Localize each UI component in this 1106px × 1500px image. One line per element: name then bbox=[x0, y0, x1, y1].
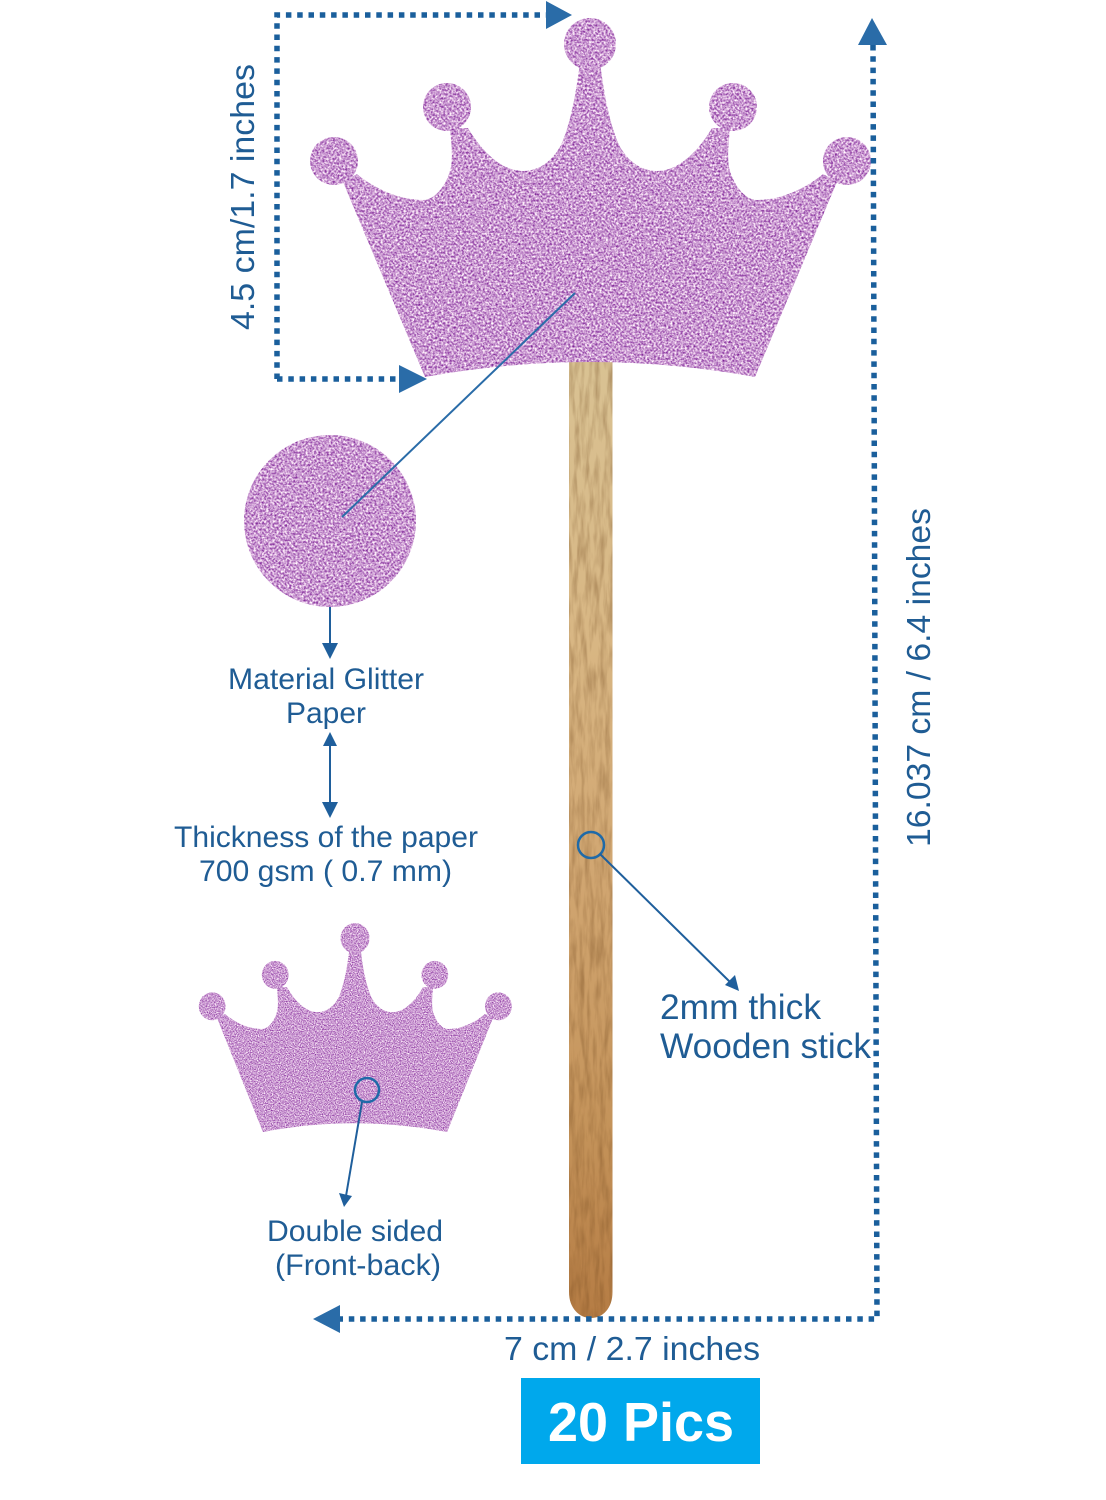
callout: wooden stick pointer bbox=[578, 832, 739, 991]
overall height and width dotted arrows bbox=[313, 18, 887, 1333]
label: double sided: (Front-back) bbox=[275, 1249, 441, 1282]
badge: 20 pics bbox=[521, 1378, 760, 1464]
label: double sided: Double sided bbox=[267, 1215, 443, 1248]
glitter material sample circle bbox=[244, 435, 416, 607]
label: total height: 16.037 cm / 6.4 inches bbox=[900, 508, 937, 847]
label: wooden stick: Wooden stick bbox=[660, 1027, 872, 1066]
label: material: Material Glitter bbox=[228, 663, 424, 696]
label: crown height: 4.5 cm/1.7 inches bbox=[224, 64, 261, 330]
label: crown width: 7 cm / 2.7 inches bbox=[504, 1330, 760, 1367]
double arrow: paper thickness bbox=[322, 732, 338, 818]
label: thickness: Thickness of the paper bbox=[174, 821, 478, 854]
label: material: Paper bbox=[286, 697, 366, 730]
large glitter crown bbox=[310, 18, 871, 377]
label: thickness: 700 gsm ( 0.7 mm) bbox=[199, 855, 452, 888]
label: wooden stick: 2mm thick bbox=[660, 988, 822, 1027]
arrow: sample to material label bbox=[322, 607, 338, 659]
height bracket: 4.5 cm dotted arrows bbox=[277, 1, 572, 393]
wooden stick bbox=[569, 360, 612, 1318]
callout: double sided pointer bbox=[339, 1078, 379, 1207]
leader line: crown to sample bbox=[342, 293, 575, 517]
badge: 20 pics: 20 Pics bbox=[548, 1391, 734, 1453]
small glitter crown bbox=[199, 923, 512, 1132]
